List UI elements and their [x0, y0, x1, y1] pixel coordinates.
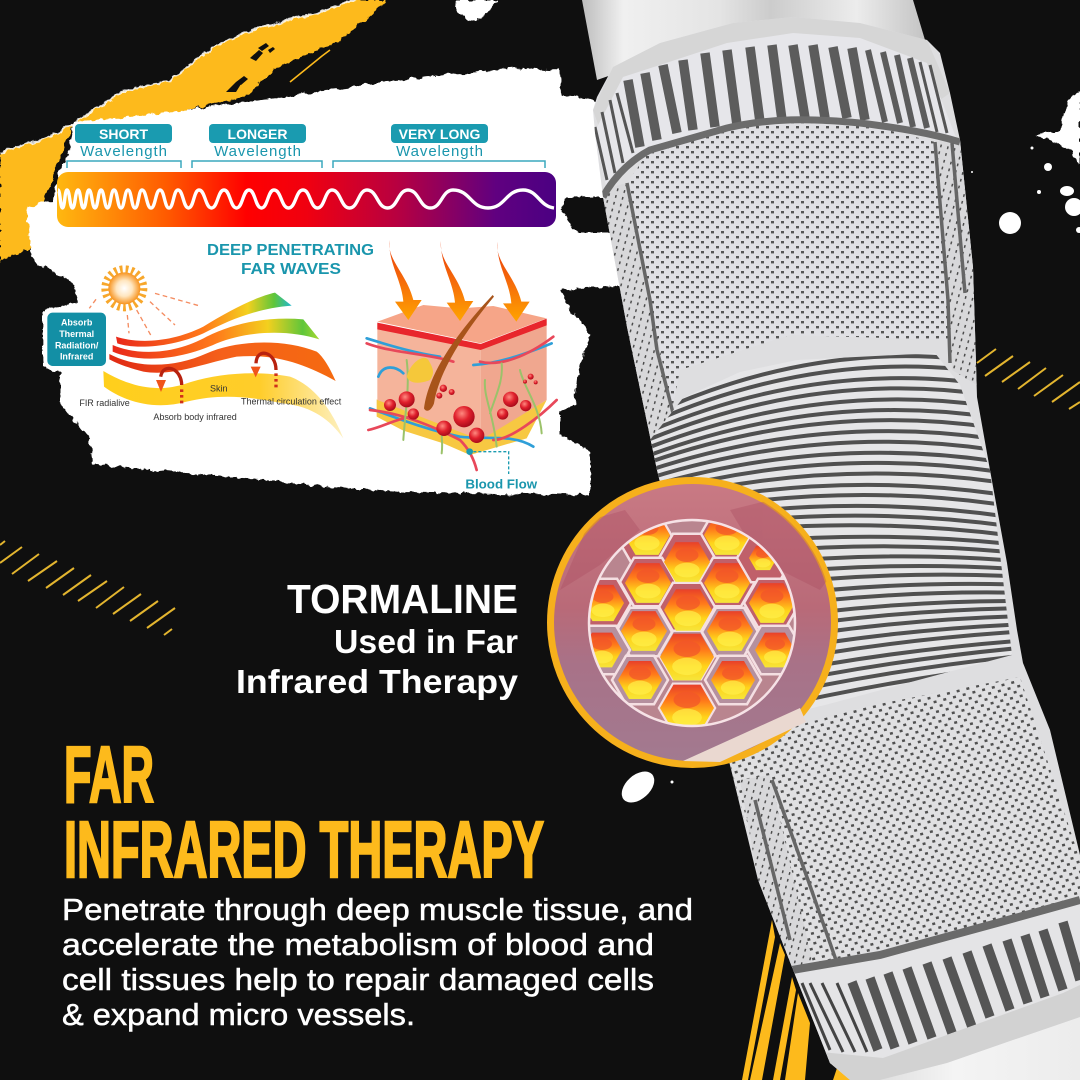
diagram labels: Absorb body infrared	[153, 412, 237, 422]
diagram labels: Skin	[210, 384, 227, 394]
yellow stripes bottom	[742, 920, 850, 1080]
heading: far infrared therapy: INFRARED THERAPY	[64, 805, 544, 894]
pill: very long wavelength: VERY LONG	[399, 126, 480, 142]
white brush panel	[26, 68, 640, 495]
callout: absorb thermal radiation: Absorb	[61, 317, 93, 327]
pill: short wavelength: Wavelength	[80, 143, 168, 160]
pill: longer wavelength: LONGER	[228, 126, 287, 142]
flames	[590, 523, 792, 725]
wavelength diagram	[57, 124, 556, 278]
bottom hem	[800, 985, 1080, 1080]
lower dotted panel	[725, 677, 1080, 970]
body text	[62, 892, 693, 1032]
heading: far infrared therapy	[64, 730, 544, 894]
callout: absorb thermal radiation	[43, 308, 110, 370]
lower side lines	[755, 780, 837, 963]
body text: Penetrate through deep muscle tissue, and	[62, 892, 693, 927]
red blood cells	[384, 374, 538, 443]
callout: absorb thermal radiation: Infrared	[60, 352, 93, 362]
text: tormaline: Infrared Therapy	[236, 663, 519, 700]
top ribbed band	[594, 33, 957, 190]
leg form tube bottom	[870, 1005, 1080, 1080]
yellow ring	[550, 480, 834, 764]
heading: deep penetrating far waves: DEEP PENETRATING	[207, 242, 374, 259]
yellow brush stroke top-left	[0, 0, 388, 262]
top hem	[593, 17, 950, 130]
thermal radiation diagram	[43, 269, 343, 438]
diagram labels	[79, 384, 342, 422]
honeycomb cells	[590, 522, 794, 724]
vessels	[367, 337, 557, 470]
circulation arrowheads	[156, 367, 261, 392]
body text: & expand micro vessels.	[62, 997, 415, 1032]
icon: sun	[105, 269, 143, 307]
skin layer	[103, 371, 343, 438]
heading: deep penetrating far waves	[207, 242, 374, 278]
pill: very long wavelength	[391, 124, 488, 160]
small heat arrows	[89, 293, 200, 335]
callout: absorb thermal radiation: Thermal	[59, 329, 94, 339]
callout: blood flow: Blood Flow	[465, 476, 538, 491]
heading: deep penetrating far waves: FAR WAVES	[241, 261, 341, 278]
text: tormaline: TORMALINE	[287, 576, 518, 622]
yellow hatch left	[0, 541, 175, 635]
pill: very long wavelength: Wavelength	[396, 143, 484, 160]
background streaks	[560, 500, 835, 590]
bottom ribbed band	[793, 920, 1080, 1064]
upper side lines	[627, 142, 965, 413]
circulation arrows	[161, 353, 276, 403]
knee striped panel	[650, 354, 1012, 700]
diagram labels: Thermal circulation effect	[241, 396, 342, 406]
hair	[424, 295, 494, 411]
honeycomb lens	[590, 522, 794, 725]
lens outline	[589, 520, 795, 726]
skin block faces	[377, 305, 547, 440]
heading: far infrared therapy: FAR	[64, 730, 154, 819]
pill: short wavelength	[75, 124, 172, 160]
pill: longer wavelength: Wavelength	[214, 143, 302, 160]
upper dotted panel	[627, 120, 950, 410]
body text: accelerate the metabolism of blood and	[62, 927, 654, 962]
diagram labels: FIR radialive	[79, 398, 130, 408]
leg form tube top	[582, 0, 925, 80]
orange heat arrows	[389, 240, 530, 322]
body text: cell tissues help to repair damaged cells	[62, 962, 654, 997]
inset circle: tourmaline honeycomb	[550, 480, 835, 764]
text: tormaline	[236, 576, 519, 700]
pill: longer wavelength	[209, 124, 306, 160]
spectrum bar with wave	[57, 172, 556, 227]
light strip	[683, 708, 806, 762]
white paint splatters	[455, 0, 1080, 809]
fat cluster	[407, 358, 433, 383]
upper edge ribs	[600, 135, 985, 460]
callout: absorb thermal radiation: Radiation/	[55, 340, 99, 350]
skin cross-section diagram	[367, 240, 557, 491]
pill: short wavelength: SHORT	[99, 126, 148, 142]
yellow hatch right	[977, 349, 1080, 409]
top seam	[603, 120, 960, 197]
callout: blood flow	[465, 448, 538, 491]
knee sleeve	[580, 0, 1080, 1080]
wave bands	[109, 293, 336, 381]
fat layer	[377, 399, 547, 455]
lower edge ribs	[740, 775, 812, 970]
text: tormaline: Used in Far	[334, 623, 518, 660]
brackets	[67, 161, 545, 168]
bottom seam	[792, 900, 1080, 970]
